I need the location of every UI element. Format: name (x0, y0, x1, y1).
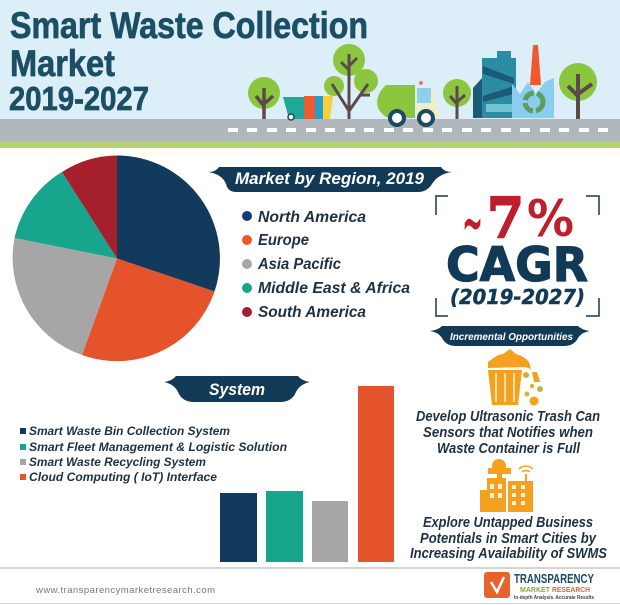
legend: regions: North America (258, 209, 366, 226)
legend: system: Smart Waste Bin Collection System (29, 424, 230, 438)
icon: large tree (559, 63, 597, 119)
icon: smart city buildings (480, 459, 533, 512)
icon: garbage truck (377, 81, 439, 125)
heading banner: market by region (208, 167, 452, 192)
icon: factory with chimney (512, 45, 554, 118)
text: smart cities: Explore Untapped Business (423, 514, 593, 531)
title (9, 5, 368, 117)
icon: tall tree (324, 44, 378, 119)
title: Smart Waste Collection (10, 5, 368, 46)
callout: CAGR: % (527, 190, 574, 248)
heading banner: incremental opportunities: Incremental Opportunities (450, 331, 573, 343)
title: Market (10, 43, 115, 84)
text: smart cities (410, 514, 607, 562)
logo: TRANSPARENCY (514, 571, 594, 586)
header sky band (0, 0, 620, 119)
logo: In-depth Analysis. Accurate Results (514, 595, 594, 601)
callout: CAGR: CAGR (446, 238, 588, 293)
text: smart cities: Potentials in Smart Cities by (420, 530, 597, 547)
logo: RESEARCH (552, 587, 590, 594)
legend: regions: Middle East & Africa (258, 280, 410, 297)
text: ultrasonic sensors (416, 408, 600, 457)
icon: recycling plant building (473, 51, 516, 118)
callout: CAGR (436, 185, 599, 316)
heading banner: market by region: Market by Region, 2019 (235, 169, 425, 188)
footer url: www.transparencymarketresearch.com (35, 585, 215, 596)
heading banner: system: System (209, 380, 265, 399)
legend: regions (242, 209, 410, 321)
footer rules (0, 567, 620, 604)
icon: small tree (443, 79, 471, 119)
logo (484, 571, 594, 601)
legend: system (20, 424, 287, 484)
text: ultrasonic sensors: Sensors that Notifies when (423, 424, 593, 441)
legend: regions: Europe (258, 232, 309, 249)
legend: system: Smart Waste Recycling System (29, 455, 206, 469)
legend: system: Cloud Computing ( IoT) Interface (29, 470, 217, 484)
icon: recycling bins (283, 96, 333, 120)
legend: system: Smart Fleet Management & Logistic Solution (29, 440, 287, 454)
bar chart: system (220, 386, 394, 562)
legend: regions: South America (258, 304, 366, 321)
callout: CAGR: ~ (462, 188, 483, 258)
callout: CAGR: 7 (487, 185, 524, 250)
icon: tree 1 (248, 77, 280, 119)
road with lane dashes and grass strip (0, 119, 620, 148)
callout: CAGR: (2019-2027) (450, 285, 585, 309)
heading banner: system (164, 376, 310, 402)
logo: MARKET (520, 587, 551, 594)
text: ultrasonic sensors: Waste Container is Full (437, 440, 581, 457)
legend: regions: Asia Pacific (257, 256, 341, 273)
title: 2019-2027 (9, 80, 149, 117)
icon: overflowing trash can (488, 349, 543, 406)
heading banner: incremental opportunities (430, 326, 590, 346)
pie chart: market by region (13, 156, 220, 361)
